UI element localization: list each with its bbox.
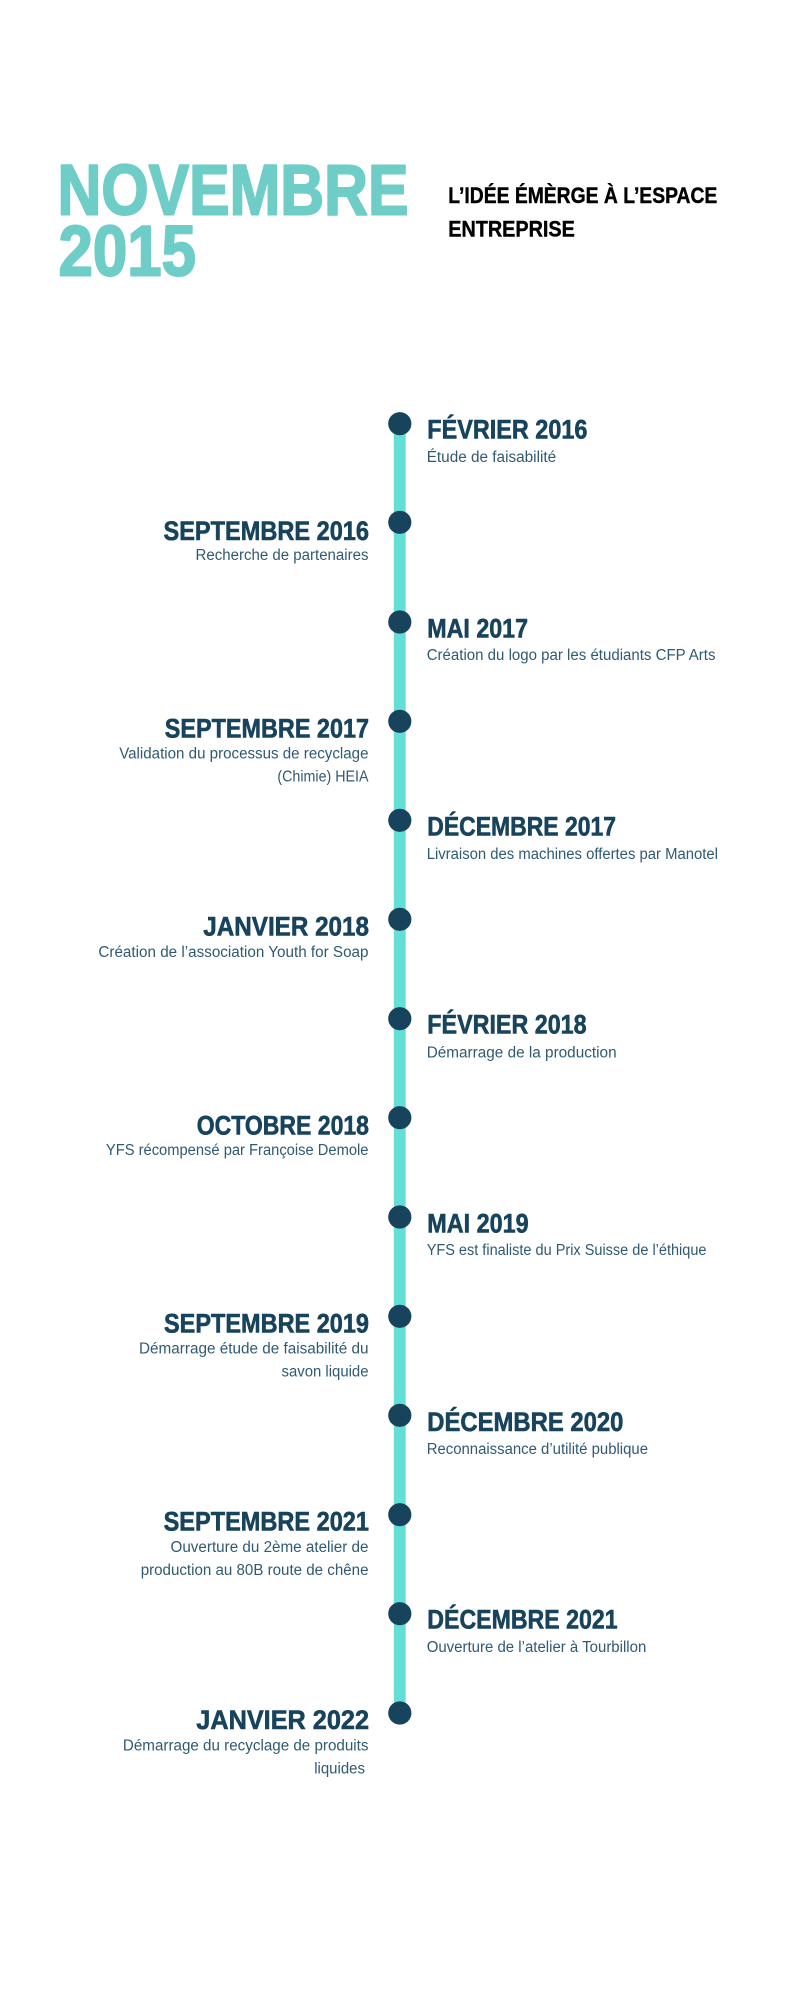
entry: septembre 2017: Validation du processus de recyclage xyxy=(119,746,368,762)
entry: octobre 2018: OCTOBRE 2018 xyxy=(197,1110,369,1140)
entry: septembre 2021 xyxy=(141,1506,369,1579)
entry: décembre 2017 xyxy=(427,810,718,863)
entry: décembre 2021 xyxy=(427,1604,646,1656)
subtitle: ENTREPRISE xyxy=(448,217,575,242)
entry: septembre 2019: Démarrage étude de faisabilité du xyxy=(139,1340,368,1357)
entry: septembre 2021: SEPTEMBRE 2021 xyxy=(164,1506,369,1536)
entry: février 2016: Étude de faisabilité xyxy=(427,449,556,466)
entry: décembre 2021: DÉCEMBRE 2021 xyxy=(427,1604,618,1635)
entry: janvier 2018: Création de l’association Youth for Soap xyxy=(98,944,369,961)
title: 2015 xyxy=(58,212,196,292)
timeline vertical line xyxy=(394,424,406,1713)
entry: septembre 2017: SEPTEMBRE 2017 xyxy=(165,713,369,743)
entry: février 2018 xyxy=(427,1009,617,1061)
entry: septembre 2019: savon liquide xyxy=(282,1363,368,1380)
subtitle xyxy=(448,183,717,242)
entry: janvier 2018 xyxy=(98,911,369,961)
entry: septembre 2021: Ouverture du 2ème atelier de xyxy=(170,1539,368,1556)
entry: septembre 2019 xyxy=(139,1308,369,1380)
entry: décembre 2021: Ouverture de l’atelier à Tourbillon xyxy=(427,1639,646,1656)
entry: mai 2017: MAI 2017 xyxy=(427,613,528,643)
entry: janvier 2022: Démarrage du recyclage de produits xyxy=(123,1738,369,1755)
entry: septembre 2016: Recherche de partenaires xyxy=(196,547,369,564)
entry: janvier 2022 xyxy=(123,1705,369,1777)
entry: septembre 2016: SEPTEMBRE 2016 xyxy=(164,516,369,546)
entry: décembre 2017: Livraison des machines offertes par Manotel xyxy=(427,846,718,863)
entry: décembre 2017: DÉCEMBRE 2017 xyxy=(427,810,616,841)
entry: mai 2019 xyxy=(427,1209,706,1259)
timeline dots xyxy=(388,412,411,1725)
subtitle: L’IDÉE ÉMÈRGE À L’ESPACE xyxy=(448,183,717,208)
entry: septembre 2017 xyxy=(119,713,369,786)
entry: septembre 2019: SEPTEMBRE 2019 xyxy=(164,1308,369,1338)
entry: septembre 2021: production au 80B route de chêne xyxy=(141,1562,368,1579)
entry: janvier 2018: JANVIER 2018 xyxy=(203,911,369,941)
entry: février 2018: Démarrage de la production xyxy=(427,1044,617,1061)
entry: octobre 2018 xyxy=(106,1110,369,1159)
entry: mai 2019: MAI 2019 xyxy=(427,1209,529,1239)
entry: septembre 2016 xyxy=(164,516,369,564)
entry: février 2016 xyxy=(427,414,587,466)
entry: janvier 2022: JANVIER 2022 xyxy=(196,1705,369,1735)
entry: décembre 2020: Reconnaissance d’utilité publique xyxy=(427,1441,648,1458)
entry: octobre 2018: YFS récompensé par Françoise Demole xyxy=(106,1142,369,1159)
title xyxy=(58,151,408,292)
entry: janvier 2022: liquides xyxy=(314,1760,365,1777)
entry: février 2018: FÉVRIER 2018 xyxy=(427,1009,587,1040)
entry: décembre 2020: DÉCEMBRE 2020 xyxy=(427,1406,623,1437)
entry: février 2016: FÉVRIER 2016 xyxy=(427,414,587,444)
title: NOVEMBRE xyxy=(58,151,408,231)
entry: mai 2017: Création du logo par les étudiants CFP Arts xyxy=(427,647,716,664)
entry: septembre 2017: (Chimie) HEIA xyxy=(277,768,369,786)
entry: mai 2019: YFS est finaliste du Prix Suisse de l’éthique xyxy=(427,1242,706,1259)
entry: décembre 2020 xyxy=(427,1406,648,1458)
entry: mai 2017 xyxy=(427,613,716,664)
